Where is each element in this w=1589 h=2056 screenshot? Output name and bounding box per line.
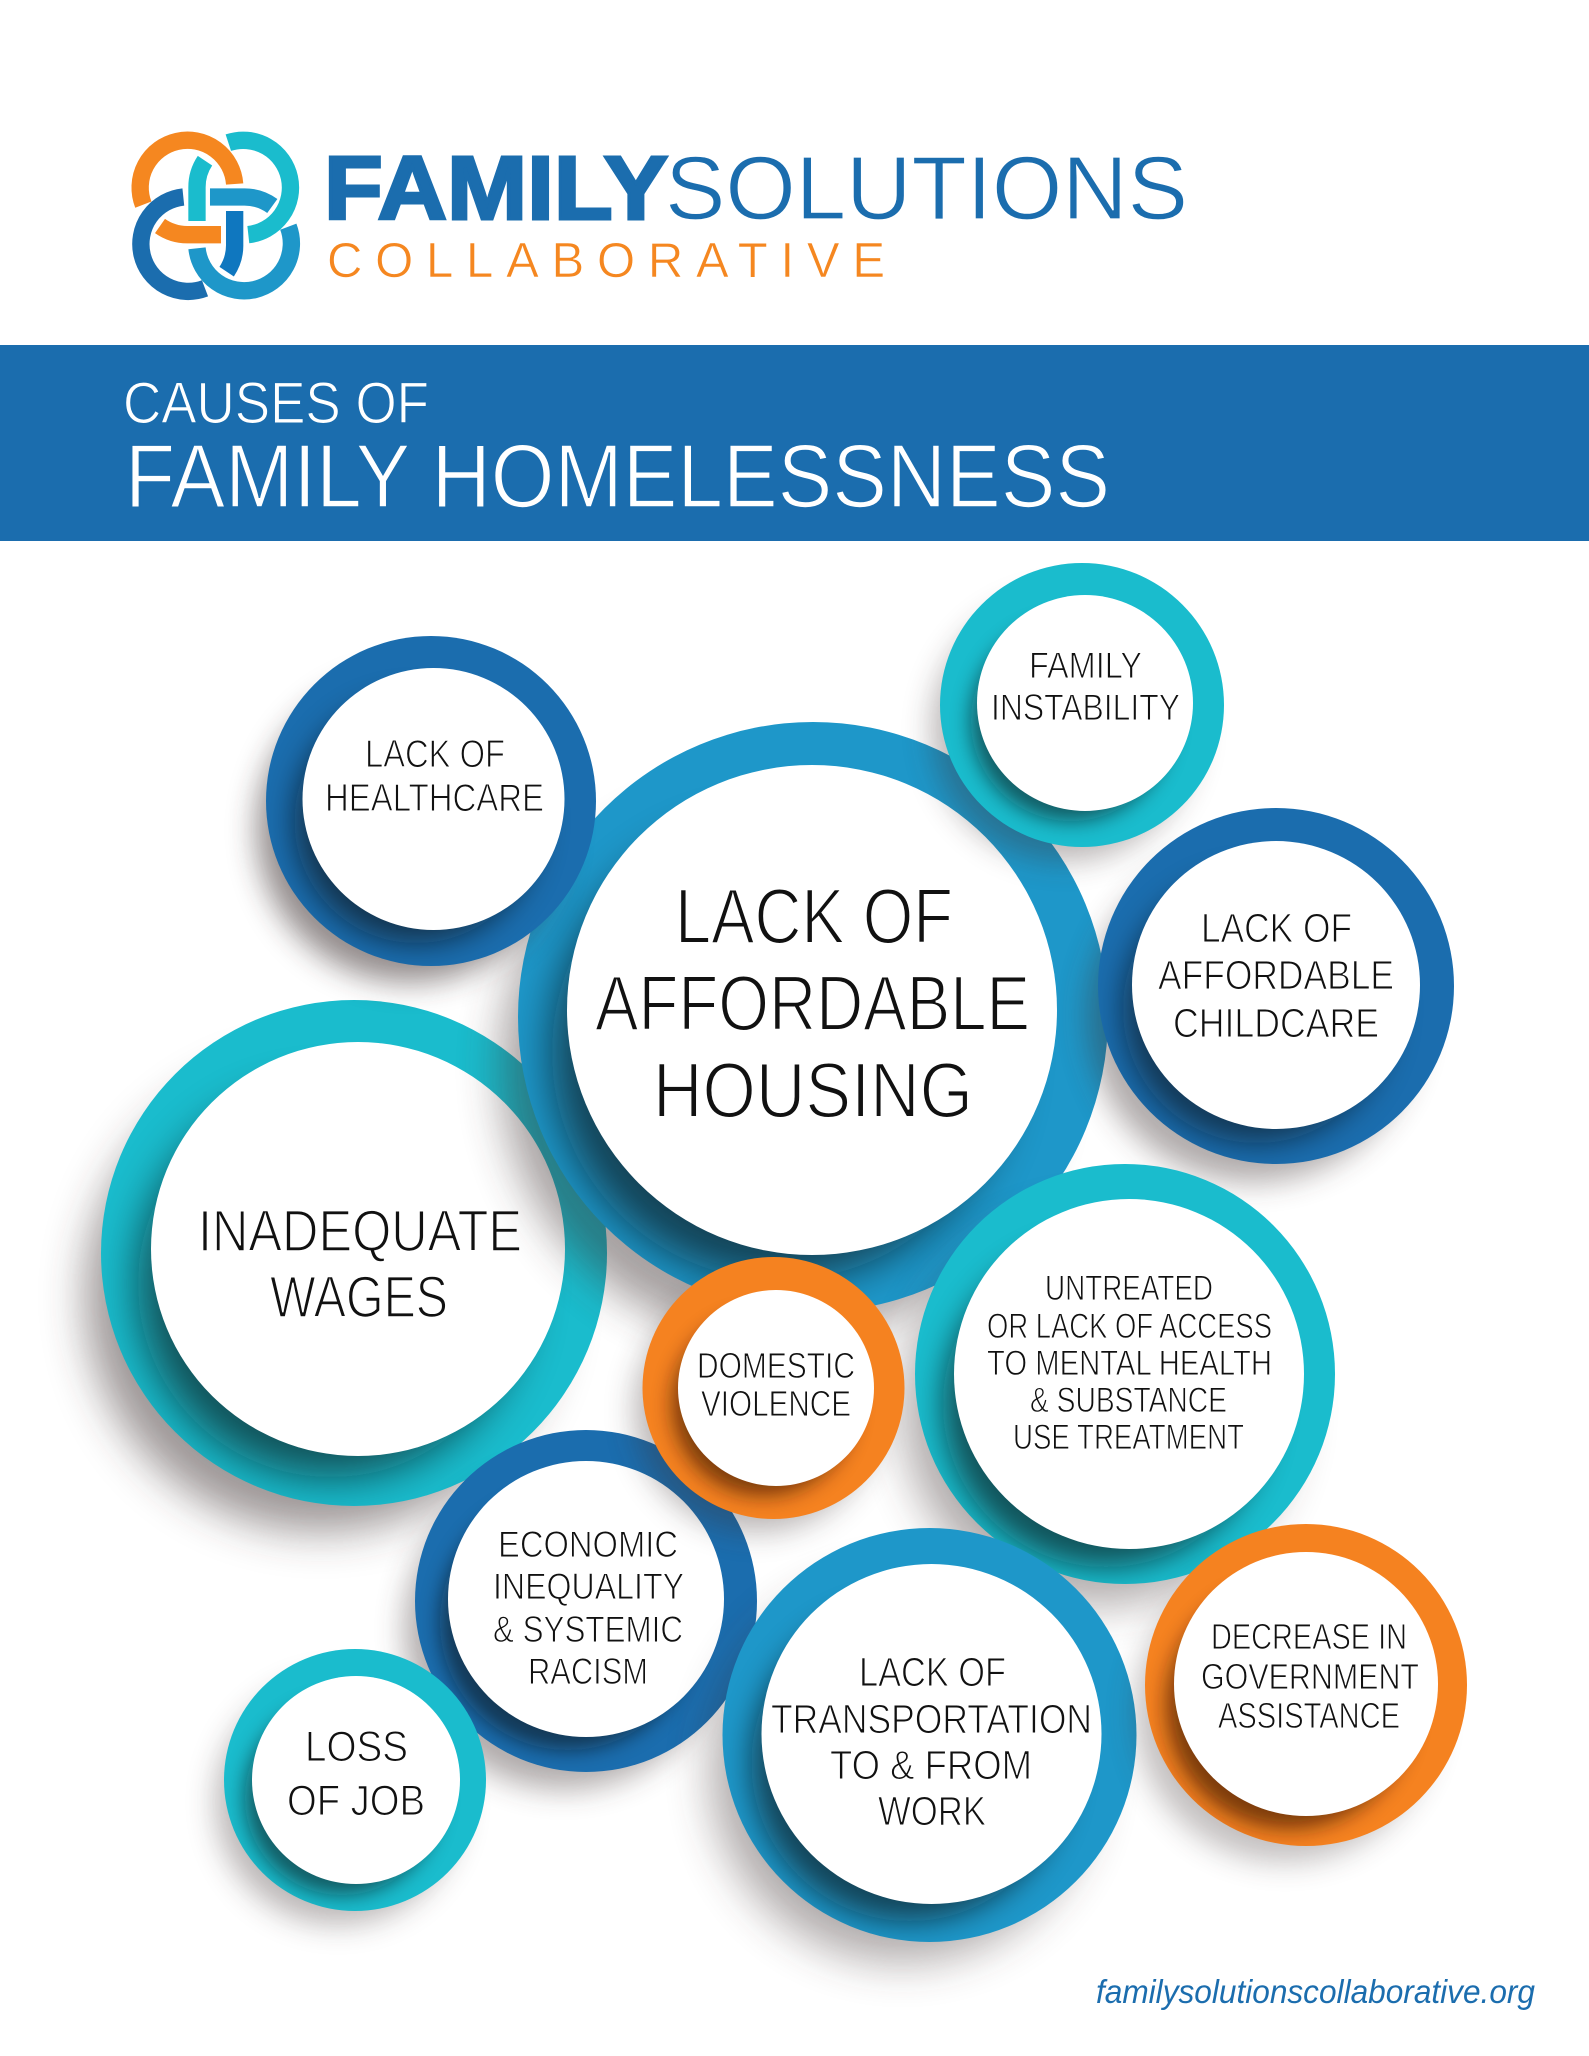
label <box>493 1524 684 1692</box>
label: TO MENTAL HEALTH <box>987 1344 1272 1383</box>
bubble: family instability <box>932 563 1224 861</box>
label: AFFORDABLE <box>595 959 1030 1047</box>
wordmark: family solutions: SOLUTIONS <box>665 139 1188 239</box>
header logo <box>140 139 1188 291</box>
bubble: loss of job <box>216 1649 486 1924</box>
label <box>325 733 544 820</box>
label: & SUBSTANCE <box>1030 1381 1227 1420</box>
label: FAMILY <box>1029 645 1142 686</box>
label: INADEQUATE <box>198 1199 522 1264</box>
label <box>991 645 1180 728</box>
label: RACISM <box>528 1651 648 1692</box>
label: LACK OF <box>365 733 505 776</box>
heading: causes of: CAUSES OF <box>123 371 429 436</box>
label: ECONOMIC <box>498 1524 678 1565</box>
label <box>1201 1616 1419 1736</box>
label: DOMESTIC <box>697 1345 855 1386</box>
label: OF JOB <box>287 1777 425 1825</box>
icon: four interlocking rings <box>140 140 291 291</box>
label: VIOLENCE <box>701 1383 851 1424</box>
label: OR LACK OF ACCESS <box>987 1307 1272 1346</box>
label: HEALTHCARE <box>325 777 544 820</box>
label: WORK <box>878 1788 986 1834</box>
label: & SYSTEMIC <box>493 1609 683 1650</box>
label <box>1158 905 1394 1046</box>
label: TRANSPORTATION <box>771 1696 1092 1742</box>
bubble: domestic violence <box>634 1257 904 1532</box>
label: UNTREATED <box>1045 1269 1213 1308</box>
label <box>287 1723 425 1825</box>
label: AFFORDABLE <box>1158 952 1394 998</box>
label: INSTABILITY <box>991 687 1180 728</box>
label: LACK OF <box>675 872 953 960</box>
bubble: decrease in government assistance <box>1135 1524 1467 1862</box>
label: LACK OF <box>1201 905 1352 951</box>
website url: familysolutionscollaborative.org <box>1096 1973 1536 2010</box>
heading: family homelessness: FAMILY HOMELESSNESS <box>125 427 1110 527</box>
label: WAGES <box>270 1265 448 1330</box>
bubble: lack of affordable housing <box>501 722 1108 1341</box>
wordmark: family solutions: FAMILY <box>324 139 668 239</box>
bubble: inadequate wages <box>86 1000 607 1531</box>
label <box>697 1345 855 1424</box>
bubble: untreated mental health and substance use <box>903 1164 1335 1605</box>
wordmark: collaborative: COLLABORATIVE <box>327 234 885 288</box>
label: CHILDCARE <box>1173 1000 1379 1046</box>
label: LACK OF <box>859 1649 1006 1695</box>
label: DECREASE IN <box>1211 1616 1407 1657</box>
bubble: lack of healthcare <box>257 636 596 982</box>
label <box>987 1269 1272 1457</box>
title banner <box>0 345 1589 541</box>
bubble: lack of affordable childcare <box>1087 808 1454 1182</box>
wordmark: family solutions <box>324 139 1188 239</box>
label <box>198 1199 522 1330</box>
label: TO & FROM <box>830 1742 1032 1788</box>
bubble: lack of transportation <box>710 1528 1136 1962</box>
label <box>595 872 1030 1134</box>
bubble: economic inequality and systemic racism <box>405 1430 757 1789</box>
label: ASSISTANCE <box>1218 1695 1400 1736</box>
label: HOUSING <box>653 1046 973 1134</box>
label: USE TREATMENT <box>1013 1418 1244 1457</box>
label: INEQUALITY <box>493 1566 684 1607</box>
label: LOSS <box>305 1723 408 1771</box>
label: GOVERNMENT <box>1201 1656 1419 1697</box>
label <box>771 1649 1092 1834</box>
